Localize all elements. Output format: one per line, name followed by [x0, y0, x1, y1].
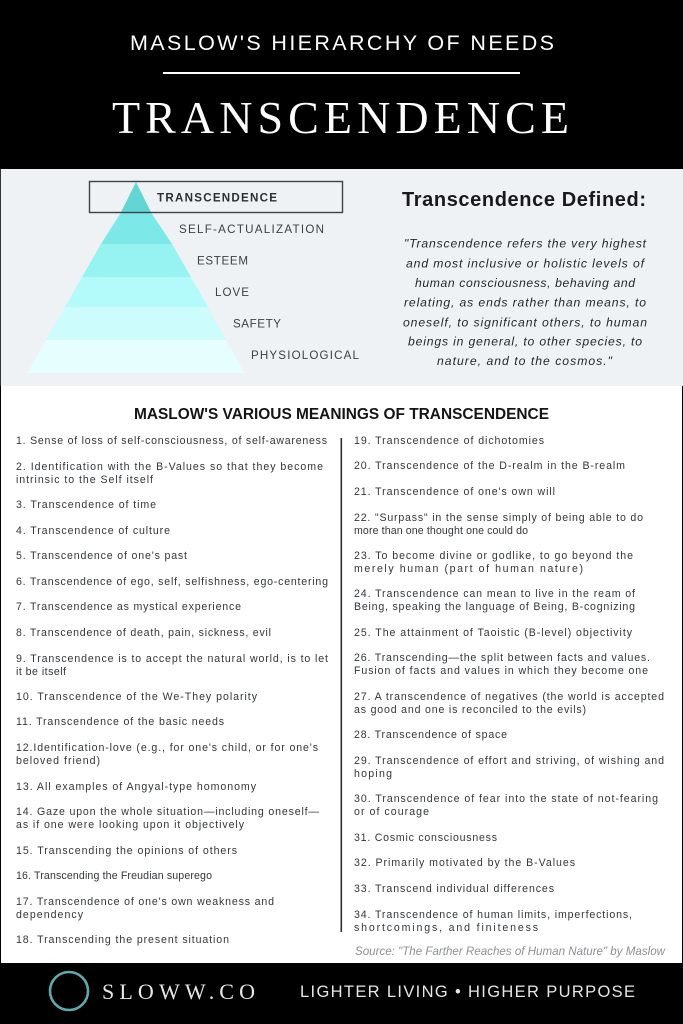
pyramid chart — [27, 182, 245, 373]
left column items: 17. Transcendence of one's own weakness and — [16, 896, 274, 908]
left column items: 18. Transcending the present situation — [16, 934, 229, 946]
left column items: 5. Transcendence of one's past — [16, 550, 187, 562]
right column items: 28. Transcendence of space — [354, 729, 507, 741]
pyramid labels: ESTEEM — [197, 254, 248, 268]
definition quote: oneself, to significant others, to human — [403, 316, 647, 330]
footer tagline: LIGHTER LIVING • HIGHER PURPOSE — [300, 983, 635, 1001]
pyramid labels: SAFETY — [233, 318, 281, 330]
left column items: dependency — [16, 909, 84, 921]
definition quote: human consciousness, behaving and — [415, 276, 636, 290]
left column items: 10. Transcendence of the We-They polarity — [16, 691, 258, 703]
left column items: 8. Transcendence of death, pain, sickness, evil — [16, 627, 271, 639]
highlight box — [90, 182, 342, 212]
left column items: as if one were looking upon it objectively — [16, 819, 245, 831]
left column items: 9. Transcendence is to accept the natural world, is to let — [16, 653, 328, 665]
footer band — [0, 963, 683, 1024]
definition quote: "Transcendence refers the very highest — [404, 236, 647, 250]
left column items: 11. Transcendence of the basic needs — [16, 716, 224, 728]
definition heading: Transcendence Defined: — [402, 189, 646, 211]
right column items: 26. Transcending—the split between facts and values. — [354, 652, 650, 664]
left column items: 16. Transcending the Freudian superego — [16, 870, 212, 882]
right column items: 21. Transcendence of one's own will — [354, 486, 555, 498]
right column items: 20. Transcendence of the D-realm in the B-realm — [354, 460, 625, 472]
right column items: 25. The attainment of Taoistic (B-level) objectivity — [354, 627, 633, 639]
definition quote: nature, and to the cosmos." — [437, 354, 613, 368]
left column items: 4. Transcendence of culture — [16, 525, 170, 537]
header title: TRANSCENDENCE — [112, 92, 569, 143]
definition quote: relating, as ends rather than means, to — [404, 296, 646, 310]
left column items: 1. Sense of loss of self-consciousness, of self-awareness — [16, 435, 327, 447]
left column items: it be itself — [16, 666, 66, 678]
right column items: merely human (part of human nature) — [354, 563, 583, 575]
left column items: 7. Transcendence as mystical experience — [16, 601, 241, 613]
header band — [0, 0, 683, 169]
panel: meanings list — [1, 386, 682, 963]
right column items: 33. Transcend individual differences — [354, 883, 554, 895]
right column items: 29. Transcendence of effort and striving, of wishing and — [354, 755, 664, 767]
panel: pyramid and definition — [0, 169, 683, 386]
left column items: 3. Transcendence of time — [16, 499, 156, 511]
right column items: 22. "Surpass" in the sense simply of being able to do — [354, 512, 643, 524]
source note: Source: "The Farther Reaches of Human Nature" by Maslow — [355, 944, 666, 958]
left column items: intrinsic to the Self itself — [16, 474, 153, 486]
list heading: MASLOW'S VARIOUS MEANINGS OF TRANSCENDENCE — [134, 406, 549, 423]
right column items: 19. Transcendence of dichotomies — [354, 435, 544, 447]
right column items: 32. Primarily motivated by the B-Values — [354, 857, 575, 869]
left column items: 13. All examples of Angyal-type homonomy — [16, 781, 257, 793]
pyramid labels: TRANSCENDENCE — [157, 192, 277, 204]
left column items: 14. Gaze upon the whole situation—including oneself— — [16, 806, 319, 818]
right column items: 30. Transcendence of fear into the state of not-fearing — [354, 793, 658, 805]
definition quote — [403, 236, 647, 368]
definition quote: beings in general, to other species, to — [408, 334, 642, 348]
right column items: more than one thought one could do — [354, 525, 528, 537]
right column items: Fusion of facts and values in which they become one — [354, 665, 648, 677]
footer brand: SLOWW.CO — [102, 979, 255, 1004]
left column items: 15. Transcending the opinions of others — [16, 845, 237, 857]
right column items: 24. Transcendence can mean to live in the ream of — [354, 588, 635, 600]
right column items: Being, speaking the language of Being, B-cognizing — [354, 601, 635, 613]
left column items — [16, 435, 328, 946]
column divider — [340, 438, 342, 932]
right column items: shortcomings, and finiteness — [354, 922, 538, 934]
right column items: as good and one is reconciled to the evils) — [354, 704, 586, 716]
pyramid labels: PHYSIOLOGICAL — [251, 349, 360, 362]
right column items: 34. Transcendence of human limits, imperfections, — [354, 909, 632, 921]
right column items: hoping — [354, 768, 392, 780]
pyramid labels: SELF-ACTUALIZATION — [179, 223, 324, 236]
right column items — [354, 435, 664, 934]
right column items: 23. To become divine or godlike, to go beyond the — [354, 550, 633, 562]
definition quote: and most inclusive or holistic levels of — [406, 256, 646, 270]
left column items: 12.Identification-love (e.g., for one's child, or for one's — [16, 742, 318, 754]
pyramid labels — [157, 192, 360, 362]
right column items: or of courage — [354, 806, 429, 818]
icon: logo ring — [50, 972, 88, 1010]
pyramid labels: LOVE — [215, 286, 249, 299]
right column items: 31. Cosmic consciousness — [354, 832, 497, 844]
left column items: beloved friend) — [16, 755, 100, 767]
left column items: 6. Transcendence of ego, self, selfishness, ego-centering — [16, 576, 328, 588]
header subtitle: MASLOW'S HIERARCHY OF NEEDS — [130, 31, 554, 55]
right column items: 27. A transcendence of negatives (the world is accepted — [354, 691, 664, 703]
left column items: 2. Identification with the B-Values so that they become — [16, 461, 323, 473]
